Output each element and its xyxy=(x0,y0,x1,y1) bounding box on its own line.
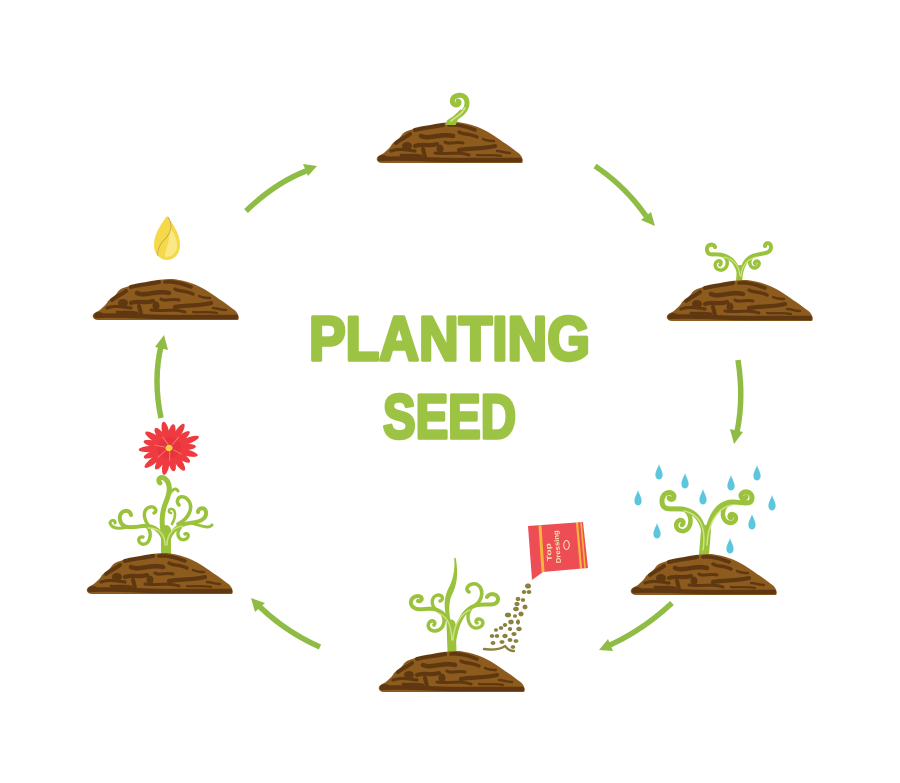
stage: seedling on soil xyxy=(667,243,813,321)
icon: rain-watered seedling xyxy=(662,492,752,555)
packet label xyxy=(545,530,563,563)
arrow: watering to fertilizing xyxy=(599,603,672,651)
icon: top dressing packet xyxy=(528,522,588,580)
icon: branching plant xyxy=(411,558,498,651)
stage: fertilizing on soil xyxy=(379,522,588,692)
icon: falling fertilizer granules xyxy=(484,583,531,651)
stage: seed on soil xyxy=(93,216,239,320)
title: PLANTING xyxy=(309,305,590,374)
packet label: Top xyxy=(545,543,554,561)
stage: sprout on soil xyxy=(377,95,523,163)
icon: seedling xyxy=(707,243,771,281)
stage: flowering on soil xyxy=(87,415,233,594)
icon: golden seed xyxy=(154,216,180,260)
arrow: seedling to watering xyxy=(730,360,743,444)
icon: raindrops xyxy=(634,464,776,553)
icon: red flower xyxy=(133,415,206,480)
arrow: sprout to seedling xyxy=(595,166,655,226)
icon: curled sprout xyxy=(447,95,467,124)
packet label: Dressing xyxy=(553,530,563,563)
arrow: seed to sprout xyxy=(246,164,317,211)
title: SEED xyxy=(383,383,516,452)
stage: watering in the rain xyxy=(631,464,777,595)
icon: flowering plant stem xyxy=(110,477,212,554)
title xyxy=(309,305,590,452)
arrow: fertilizing to flowering xyxy=(251,598,320,647)
arrow: flowering to seed xyxy=(155,335,168,418)
